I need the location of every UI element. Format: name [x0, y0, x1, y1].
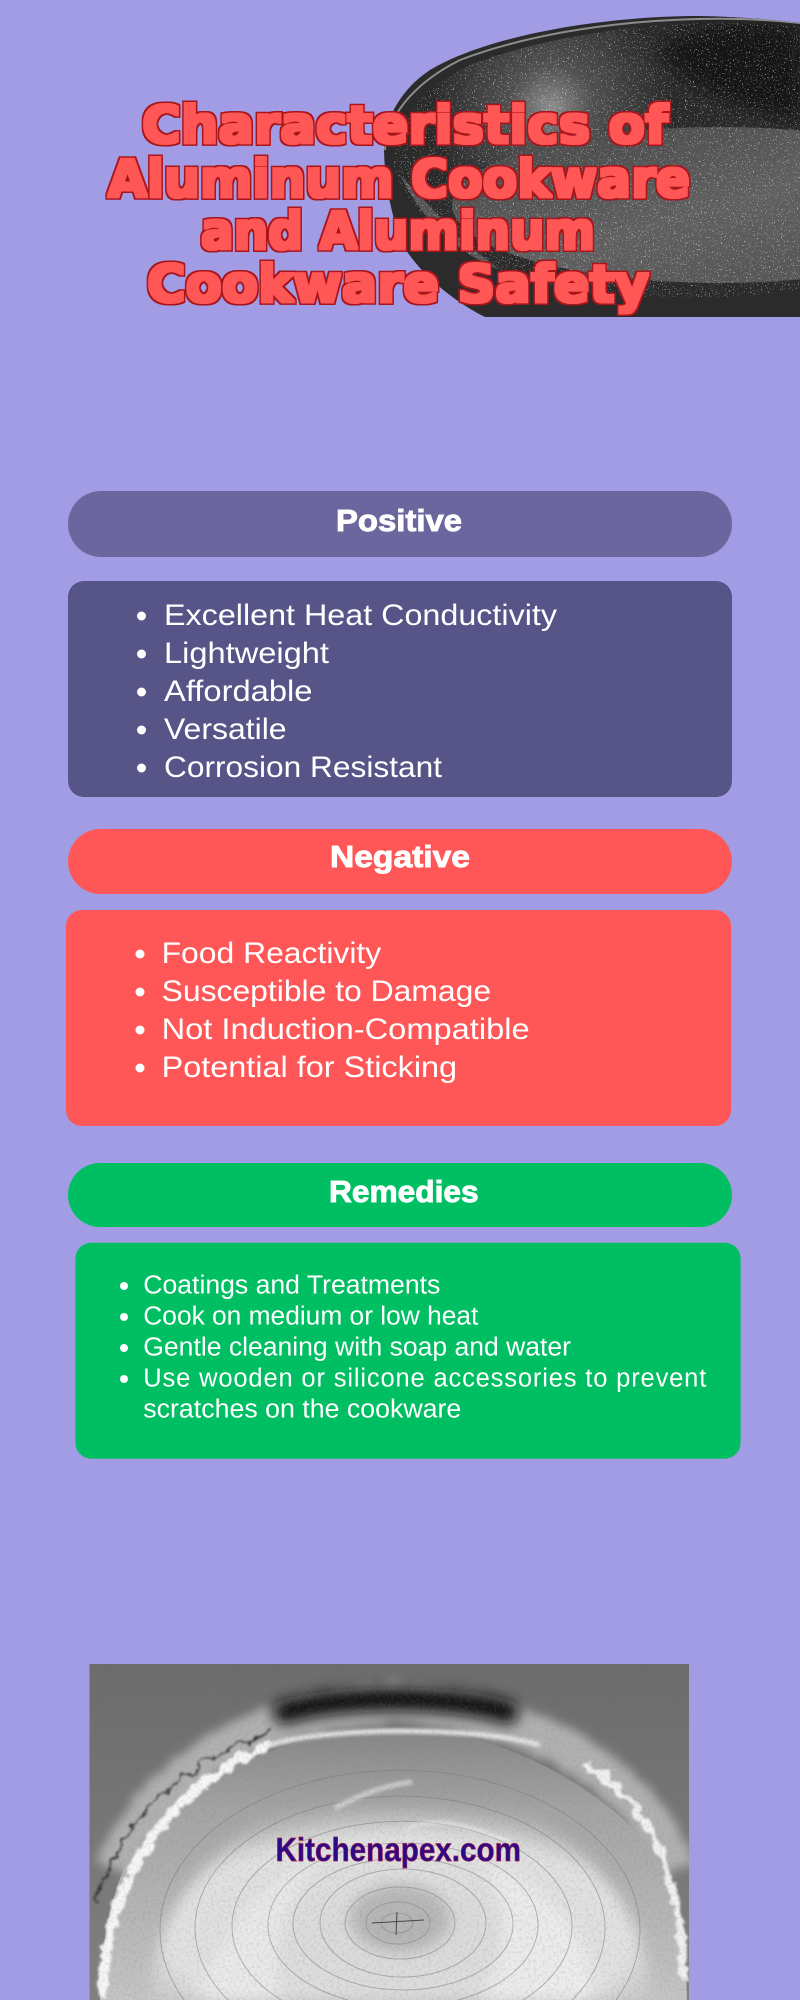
list: remedies points: Use wooden or silicone accessories to prevent	[143, 1364, 706, 1392]
image: dark speckled frying pan	[380, 10, 800, 320]
title: Cookware Safety	[147, 255, 649, 315]
list: remedies points: Cook on medium or low heat	[143, 1302, 478, 1330]
title: and Aluminum	[201, 202, 595, 262]
list: negative points: Food Reactivity	[162, 937, 381, 970]
panel: remedies	[68, 1163, 741, 1459]
list: positive points: Versatile	[164, 713, 287, 746]
list: remedies points: Gentle cleaning with soap and water	[143, 1333, 572, 1361]
heading: positive	[68, 491, 732, 557]
heading: remedies	[68, 1163, 732, 1227]
list: negative points: Potential for Sticking	[162, 1051, 457, 1084]
list: positive points: Corrosion Resistant	[164, 751, 443, 784]
list: positive points: Excellent Heat Conductivity	[164, 599, 557, 632]
list: positive points: Affordable	[164, 675, 312, 708]
panel: positive	[68, 491, 732, 797]
image: worn aluminum pot interior	[90, 1664, 689, 2000]
panel: negative	[66, 829, 732, 1126]
heading: remedies: Remedies	[329, 1174, 479, 1209]
list: negative points: Not Induction-Compatible	[162, 1013, 530, 1046]
list: negative points: Susceptible to Damage	[162, 975, 491, 1008]
title: Aluminum Cookware	[108, 150, 690, 210]
list: remedies points: scratches on the cookware	[143, 1395, 461, 1423]
list: remedies points	[75, 1243, 741, 1459]
heading: positive: Positive	[336, 503, 462, 538]
list: negative points	[66, 910, 731, 1126]
list: positive points: Lightweight	[164, 637, 330, 670]
heading: negative: Negative	[330, 839, 470, 874]
heading: negative	[68, 829, 732, 894]
watermark: kitchenapex.com: Kitchenapex.com	[276, 1831, 521, 1868]
list: positive points	[68, 581, 732, 797]
title: Characteristics of	[142, 96, 669, 156]
list: remedies points: Coatings and Treatments	[143, 1271, 440, 1299]
title	[108, 96, 690, 315]
